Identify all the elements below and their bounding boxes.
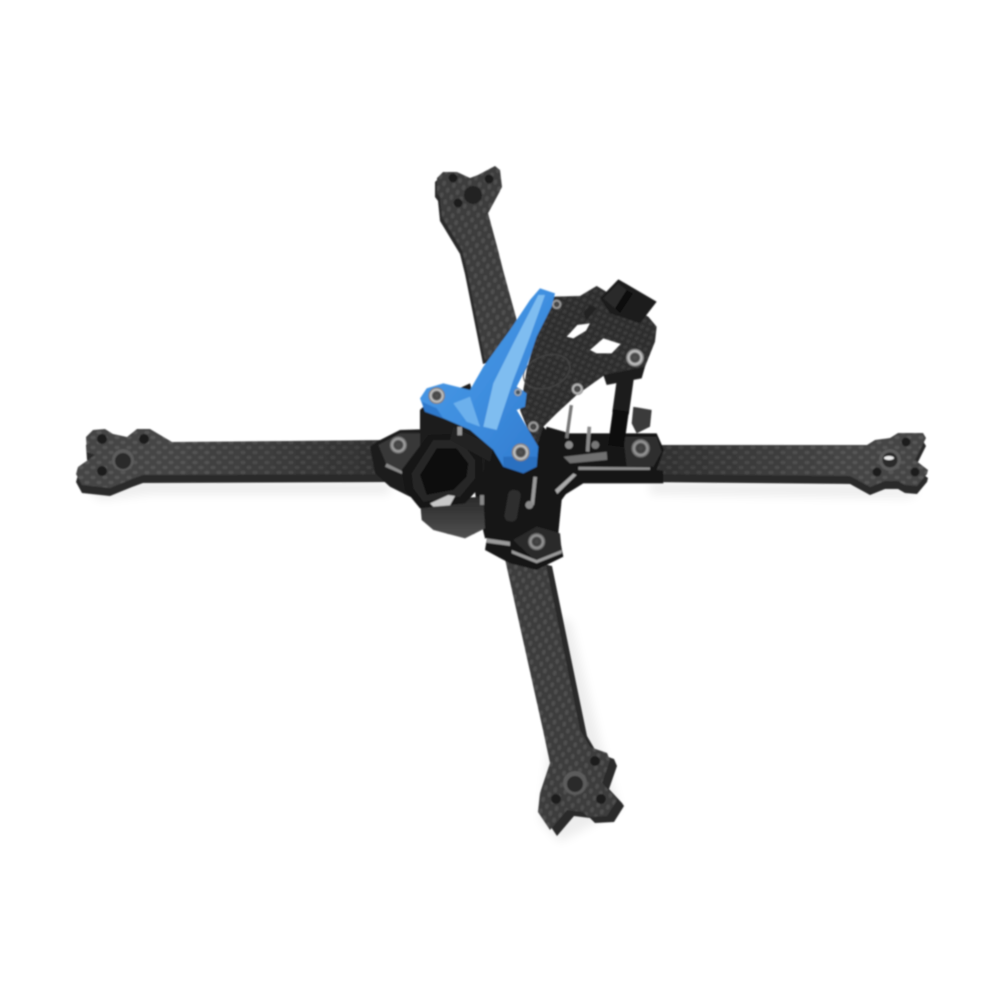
standoffs and screws — [450, 376, 652, 522]
antenna mount — [600, 279, 657, 323]
arm: top rear — [435, 166, 525, 364]
camera cage block — [402, 433, 485, 538]
top carbon plate — [519, 286, 657, 447]
top plate screws — [528, 299, 644, 432]
bottom base mount — [483, 470, 563, 570]
centre stack, drawn in zoomed coordinates — [370, 279, 664, 570]
soft floor shadows — [85, 480, 920, 842]
central body filler — [470, 427, 583, 538]
blue 3D printed antenna mount — [420, 288, 555, 473]
left base mount — [370, 383, 487, 503]
arm: bottom front — [503, 550, 624, 836]
arm: left — [76, 429, 395, 496]
right base mount — [533, 427, 664, 500]
arm: right — [640, 433, 928, 495]
